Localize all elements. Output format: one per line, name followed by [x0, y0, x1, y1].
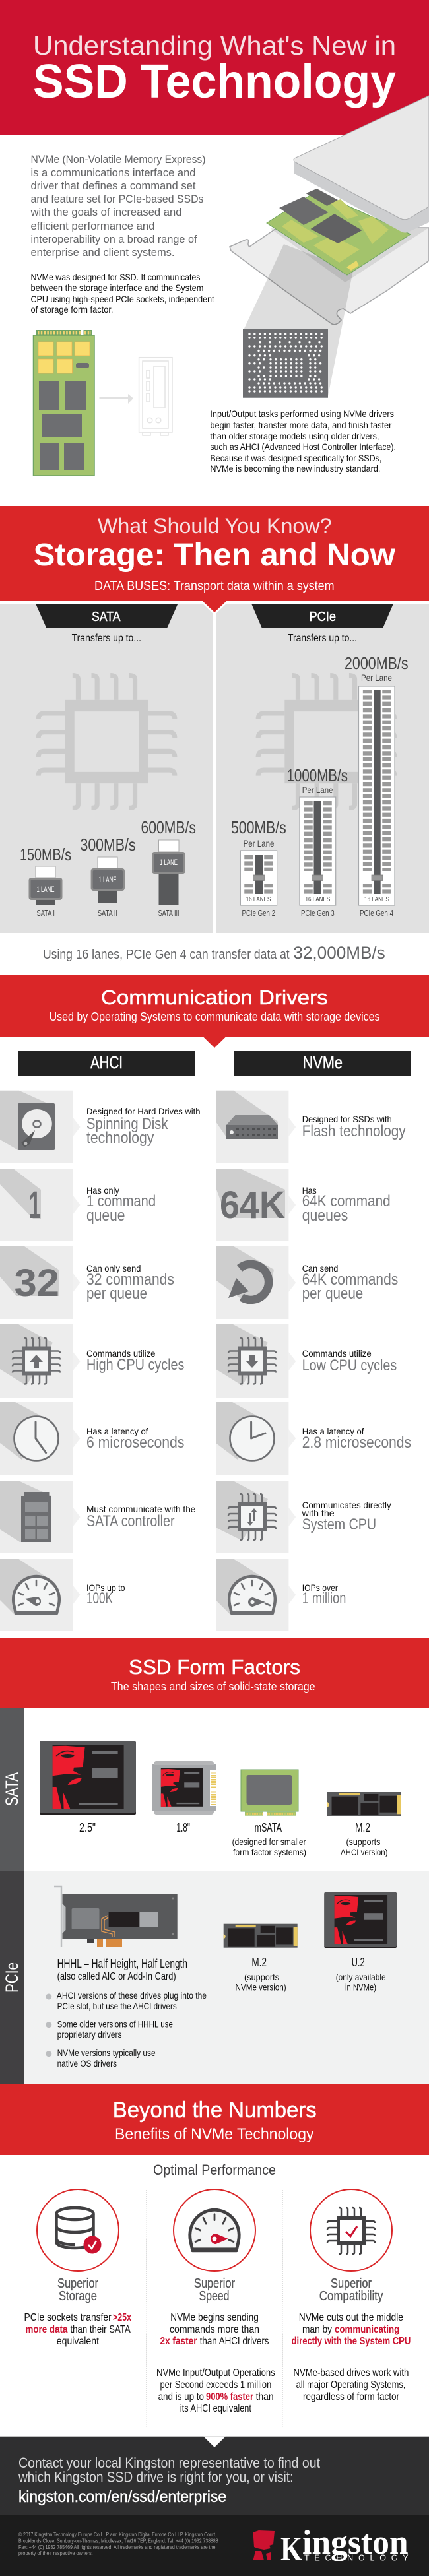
PCIe Gen 2 card: Per Lane: [244, 838, 275, 849]
fine print: Fax: +44 (0) 1932 785469 All rights reserved. All trademarks and registered trademarks are the: [18, 2544, 216, 2550]
PCIe Gen 2 card: [231, 818, 286, 918]
footer: [0, 2515, 429, 2576]
panel: SATA form factors: [0, 1708, 401, 1871]
row: AHCI commands per queue: per queue: [86, 1285, 147, 1303]
exploded SSD illustration: [230, 96, 429, 396]
row: AHCI commands per queue: 32 commands: [86, 1271, 174, 1289]
row: NVMe command queues: [216, 1169, 391, 1241]
row: AHCI latency: Has a latency of: [86, 1426, 148, 1436]
row: NVMe system CPU: [216, 1481, 391, 1553]
text: speed benefit 2: and is up to: [158, 2391, 204, 2402]
drive: HHHL card: [54, 1886, 178, 1947]
paragraph: NVMe designed for SSD: CPU using high-speed PCIe sockets, independent: [30, 294, 214, 304]
section banner: communication drivers: [0, 975, 429, 1048]
drive: U.2: U.2: [352, 1956, 365, 1969]
row: NVMe system CPU: System CPU: [302, 1516, 376, 1533]
heading: storage then and now: Storage: Then and Now: [34, 538, 396, 573]
PCIe Gen 3 card: Per Lane: [302, 785, 333, 795]
sidebar label: PCIe: PCIe: [2, 1962, 22, 1993]
text: speed benefit 1: 2x faster: [160, 2336, 197, 2347]
PCIe Gen 4 card: [345, 653, 409, 918]
PCIe Gen 4 card: Per Lane: [361, 672, 392, 683]
icon: CPU with down arrow: [228, 1338, 276, 1384]
row: AHCI spinning disk: Designed for Hard Drives with: [86, 1106, 201, 1116]
row: NVMe commands per queue: per queue: [302, 1285, 363, 1303]
text: compatibility benefit 2: regardless of form factor: [303, 2391, 400, 2402]
bullet: older versions: proprietary drivers: [57, 2029, 122, 2040]
icon: database with check: [37, 2189, 119, 2271]
drive: 1.8 inch: 1.8": [176, 1821, 190, 1834]
row: NVMe command queues: Has: [302, 1185, 317, 1196]
row: AHCI IOPs: IOPs up to: [86, 1582, 125, 1593]
PCIe Gen 3 card: [286, 765, 348, 918]
icon: CPU with up arrow: [13, 1338, 60, 1384]
label: SATA transfers: Transfers up to...: [72, 633, 141, 644]
section banner: beyond the numbers: [0, 2084, 429, 2155]
fine print: Brooklands Close, Sunbury-on-Thames, Middlesex, TW16 7EP, England. Tel: +44 (0) 1932 738888: [18, 2538, 218, 2544]
column: superior compatibility: [292, 2189, 411, 2402]
sidebar label: SATA: SATA: [2, 1772, 22, 1806]
icon: number 32: 32: [15, 1262, 59, 1304]
fine print: [18, 2531, 218, 2556]
icon: refresh arrow: [228, 1264, 269, 1300]
row: AHCI spinning disk: Spinning Disk: [86, 1115, 168, 1133]
text: compatibility benefit 2: NVMe-based drives work with: [293, 2367, 409, 2379]
icon: M.2 circuit board: [33, 330, 94, 476]
SATA II stick: 1 LANE: [99, 875, 116, 884]
text: storage benefit: than their SATA: [70, 2324, 131, 2335]
text: compatibility benefit 1: NVMe cuts out the middle: [299, 2312, 403, 2323]
title line 1: Understanding What's New in: [33, 30, 396, 61]
PCIe Gen 2 card: 500MB/s: [231, 818, 286, 837]
row: AHCI command queue: queue: [86, 1207, 125, 1225]
drive: 2.5 inch: [40, 1741, 136, 1834]
banner pointer: [200, 601, 229, 615]
row: AHCI command queue: [0, 1169, 156, 1241]
column: superior storage: [24, 2189, 131, 2347]
arrow: board to computer: [99, 394, 133, 404]
drive: M.2 NVMe: (supports: [244, 1972, 279, 1982]
drive: M.2 SATA: [327, 1792, 401, 1857]
row: NVMe IOPs: 1 million: [302, 1590, 346, 1607]
heading: what should you know: What Should You Know?: [98, 514, 331, 538]
SATA I stick: 150MB/s: [20, 845, 71, 864]
icon: gauge high: [229, 1576, 275, 1615]
text: speed benefit 2: per Second exceeds 1 million: [160, 2379, 271, 2391]
row: AHCI high CPU cycles: [0, 1324, 184, 1398]
PCIe Gen 3 card: 1000MB/s: [286, 765, 348, 785]
row: NVMe flash: Flash technology: [302, 1122, 406, 1140]
row: NVMe system CPU: with the: [302, 1508, 335, 1518]
paragraph: NVMe designed for SSD: between the storage interface and the System: [30, 282, 203, 293]
panel: PCIe form factors: [0, 1871, 429, 2084]
icon: chip underside with solder balls: [243, 329, 328, 398]
drive: U.2: in NVMe): [345, 1982, 376, 1993]
text: compatibility benefit 1: man by: [302, 2324, 332, 2335]
column heading: AHCI: [18, 1051, 195, 1076]
drive: mSATA: mSATA: [255, 1821, 282, 1834]
paragraph: NVMe designed for SSD: NVMe was designed for SSD. It communicates: [30, 272, 201, 282]
column: superior speed: Superior: [194, 2276, 235, 2291]
drive: M.2 SATA: M.2: [355, 1821, 370, 1834]
row: AHCI high CPU cycles: Commands utilize: [86, 1348, 156, 1359]
text: compatibility benefit 1: [292, 2312, 411, 2347]
text: speed benefit 1: commands more than: [170, 2324, 259, 2335]
drive: 2.5 inch: 2.5": [79, 1821, 96, 1834]
paragraph: NVMe designed for SSD: [30, 272, 214, 315]
text: speed benefit 2: NVMe Input/Output Operations: [156, 2367, 275, 2379]
bar chart: SATA speeds: [20, 818, 196, 918]
SATA I stick: [20, 845, 71, 918]
intro paragraph: with the goals of increased and: [30, 206, 182, 218]
bullet: older versions: Some older versions of HHHL use: [57, 2019, 173, 2030]
row: AHCI IOPs: [0, 1559, 125, 1631]
text: speed benefit 1: than AHCI drivers: [200, 2336, 269, 2347]
intro paragraph: NVMe (Non-Volatile Memory Express): [30, 153, 206, 166]
PCIe Gen 3 card: PCIe Gen 3: [301, 908, 335, 918]
section banner: communication drivers: Communication Drivers: [101, 986, 328, 1009]
text: speed benefit 2: 900% faster: [206, 2391, 253, 2402]
PCIe Gen 2 card: PCIe Gen 2: [242, 908, 275, 918]
row: NVMe command queues: 64K command: [302, 1192, 391, 1210]
icon: flash drive box: [226, 1115, 278, 1139]
text: compatibility benefit 1: communicating: [335, 2324, 399, 2335]
column heading: AHCI: AHCI: [90, 1052, 123, 1072]
contact band: kingston.com/en/ssd/enterprise: [18, 2488, 226, 2506]
SATA III stick: [141, 818, 196, 918]
SATA III stick: 600MB/s: [141, 818, 196, 837]
text: storage benefit: equivalent: [57, 2336, 99, 2347]
drive: M.2 NVMe: M.2: [251, 1956, 267, 1969]
SATA III stick: SATA III: [158, 908, 180, 918]
column: superior storage: Superior: [57, 2276, 98, 2291]
row: AHCI high CPU cycles: High CPU cycles: [86, 1356, 184, 1374]
row: NVMe flash: Designed for SSDs with: [302, 1114, 392, 1124]
row: NVMe low CPU cycles: Commands utilize: [302, 1348, 372, 1359]
icon: CPU with check: [310, 2189, 392, 2271]
text: storage benefit: more data: [25, 2324, 67, 2335]
paragraph: NVMe designed for SSD: of storage form factor.: [30, 304, 114, 315]
row: AHCI SATA controller: [0, 1481, 196, 1553]
fine print: © 2017 Kingston Technology Europe Co LLP and Kingston Digital Europe Co LLP, Kingston Court,: [18, 2531, 216, 2538]
SATA I stick: 1 LANE: [37, 885, 54, 894]
row: NVMe commands per queue: 64K commands: [302, 1271, 398, 1289]
section banner: SSD form factors: [0, 1638, 429, 1708]
intro paragraph: and feature set for PCIe-based SSDs: [30, 193, 203, 205]
intro paragraph: enterprise and client systems.: [30, 246, 174, 259]
text: speed benefit 1: [160, 2312, 269, 2347]
icon: SATA controller: [21, 1492, 51, 1542]
icon: hard disk: [18, 1103, 55, 1150]
text: HHHL description: (also called AIC or Add-In Card): [57, 1971, 176, 1982]
column: superior compatibility: Superior: [331, 2276, 372, 2291]
bullet: AHCI versions: AHCI versions of these drives plug into the: [57, 1990, 207, 2001]
paragraph: input/output tasks: than older storage models using older drivers,: [210, 431, 379, 441]
SATA I stick: SATA I: [37, 908, 55, 918]
title banner: [0, 0, 429, 135]
column: superior storage: Storage: [59, 2289, 97, 2303]
row: AHCI command queue: 1 command: [86, 1192, 156, 1210]
icon: 64K: 64K: [220, 1184, 285, 1227]
paragraph: input/output tasks: NVMe is becoming the new industry standard.: [210, 463, 380, 474]
row: NVMe IOPs: [216, 1559, 346, 1631]
text: compatibility benefit 2: [293, 2367, 409, 2402]
intro paragraph: driver that defines a command set: [30, 179, 196, 192]
logo: Kingston wordmark: K: [280, 2530, 302, 2568]
icon: gauge low: [13, 1576, 59, 1615]
text: storage benefit: >25x: [113, 2312, 131, 2323]
paragraph: input/output tasks: Because it was designed specifically for SSDs,: [210, 453, 381, 463]
PCIe Gen 4 card: 2000MB/s: [345, 653, 409, 673]
paragraph: input/output tasks: begin faster, transfer more data, and finish faster: [210, 420, 392, 430]
contact band: [0, 2437, 429, 2515]
tab: PCIe: PCIe: [309, 610, 336, 624]
PCIe Gen 4 card: 16 LANES: [364, 895, 389, 903]
intro paragraph: efficient performance and: [30, 220, 154, 232]
SATA II stick: SATA II: [98, 908, 117, 918]
icon: CPU with two-way arrows: [228, 1494, 276, 1540]
paragraph: input/output tasks: Input/Output tasks performed using NVMe drivers: [210, 408, 394, 419]
row: AHCI latency: [0, 1402, 184, 1475]
drive: M.2 SATA: AHCI version): [341, 1847, 388, 1857]
icon: PCIe chip watermark: [258, 676, 395, 808]
row: NVMe IOPs: IOPs over: [302, 1582, 338, 1593]
row: AHCI command queue: Has only: [86, 1185, 119, 1196]
bullet: AHCI versions: [46, 1990, 207, 2011]
tab: PCIe: [251, 604, 393, 628]
row: NVMe low CPU cycles: [216, 1324, 397, 1398]
row: NVMe system CPU: Communicates directly: [302, 1500, 391, 1510]
text: speed benefit 2: [156, 2367, 275, 2414]
section banner: SSD form factors: SSD Form Factors: [129, 1656, 300, 1679]
row: AHCI commands per queue: Can only send: [86, 1263, 141, 1273]
drive: M.2 NVMe: NVMe version): [235, 1982, 286, 1993]
bar chart: PCIe speeds: [231, 653, 409, 918]
drive: mSATA: form factor systems): [233, 1847, 306, 1857]
row: NVMe command queues: queues: [302, 1207, 348, 1225]
logo: Kingston head: [253, 2530, 275, 2560]
title line 2: SSD Technology: [33, 55, 396, 108]
drive: mSATA: [232, 1770, 306, 1857]
icon: clock 6 microseconds: [15, 1416, 58, 1461]
callout: 32,000MB/s: Using 16 lanes, PCIe Gen 4 can transfer data at: [43, 948, 290, 962]
text: speed benefit 2: its AHCI equivalent: [180, 2403, 251, 2414]
row: AHCI latency: 6 microseconds: [86, 1434, 184, 1452]
SATA II stick: 300MB/s: [81, 835, 136, 854]
row: AHCI spinning disk: technology: [86, 1129, 154, 1147]
PCIe Gen 4 card: PCIe Gen 4: [360, 908, 393, 918]
icon: speed gauge: [174, 2189, 255, 2271]
column: superior speed: [156, 2189, 275, 2414]
column: superior speed: Speed: [199, 2289, 230, 2303]
callout: 32,000MB/s: [43, 943, 385, 963]
icon: SATA chip watermark: [38, 676, 175, 808]
tab: SATA: SATA: [92, 610, 121, 624]
drive: M.2 SATA: (supports: [346, 1836, 380, 1847]
text: compatibility benefit 2: all major Operating Systems,: [296, 2379, 405, 2391]
drive: mSATA: (designed for smaller: [232, 1836, 306, 1847]
row: NVMe commands per queue: [216, 1246, 398, 1319]
row: AHCI SATA controller: SATA controller: [86, 1512, 175, 1530]
drive: 1.8 inch: [152, 1761, 216, 1834]
section banner: communication drivers: Used by Operating Systems to communicate data with storage devices: [50, 1010, 380, 1023]
text: speed benefit 2: than: [256, 2391, 274, 2402]
row: AHCI commands per queue: [0, 1246, 174, 1319]
contact band: Contact your local Kingston representative to find out: [18, 2455, 320, 2471]
SATA II stick: [81, 835, 136, 918]
text: storage benefit: PCIe sockets transfer: [24, 2312, 112, 2323]
bullet: older versions: [46, 2019, 173, 2040]
icon: number 1: 1: [29, 1184, 41, 1227]
section banner: storage then and now: [0, 506, 429, 601]
row: AHCI SATA controller: Must communicate with the: [86, 1504, 196, 1514]
drive: U.2: [324, 1892, 397, 1993]
row: AHCI spinning disk: [0, 1091, 201, 1163]
bullet: AHCI versions: PCIe slot, but use the AHCI drivers: [57, 2001, 177, 2011]
intro paragraph: [30, 153, 205, 259]
text: speed benefit 1: NVMe begins sending: [170, 2312, 259, 2323]
panel: comparison background: [0, 604, 429, 933]
label: PCIe transfers: Transfers up to...: [288, 633, 357, 644]
paragraph: input/output tasks: such as AHCI (Advanced Host Controller Interface).: [210, 441, 396, 452]
subheading: data buses: DATA BUSES: Transport data within a system: [94, 579, 335, 593]
SATA III stick: 1 LANE: [160, 858, 178, 867]
logo: Kingston wordmark: TECHNOLOGY: [304, 2554, 409, 2563]
row: NVMe latency: Has a latency of: [302, 1426, 364, 1436]
paragraph: input/output tasks: [210, 408, 396, 474]
bullet: NVMe versions: NVMe versions typically use: [57, 2047, 156, 2058]
section banner: SSD form factors: The shapes and sizes of solid-state storage: [111, 1680, 315, 1693]
section banner: beyond the numbers: Beyond the Numbers: [113, 2098, 317, 2123]
tab: SATA: [36, 604, 178, 628]
contact band: which Kingston SSD drive is right for you, or visit:: [18, 2469, 293, 2486]
PCIe Gen 2 card: 16 LANES: [246, 895, 271, 903]
icon: clock 2.8 microseconds: [230, 1416, 275, 1461]
logo: Kingston wordmark: ingston: [302, 2524, 409, 2561]
text: HHHL description: [57, 1957, 187, 1982]
text: HHHL description: HHHL – Half Height, Half Length: [57, 1957, 187, 1970]
bullet: NVMe versions: [46, 2047, 156, 2069]
row: NVMe latency: 2.8 microseconds: [302, 1434, 411, 1452]
text: storage benefit: [24, 2312, 131, 2347]
bullet: NVMe versions: native OS drivers: [57, 2058, 117, 2069]
intro paragraph: interoperability on a broad range of: [30, 233, 197, 245]
drive: M.2 NVMe: [224, 1924, 298, 1993]
row: NVMe flash: [216, 1091, 406, 1163]
icon: desktop computer outline: [139, 358, 172, 435]
column heading: NVMe: [234, 1051, 411, 1076]
heading: optimal performance: Optimal Performance: [153, 2162, 276, 2178]
column: superior compatibility: Compatibility: [319, 2289, 383, 2303]
intro paragraph: is a communications interface and: [30, 166, 195, 179]
row: AHCI IOPs: 100K: [86, 1590, 113, 1607]
drive: U.2: (only available: [336, 1972, 386, 1982]
row: NVMe low CPU cycles: Low CPU cycles: [302, 1357, 397, 1374]
column heading: NVMe: NVMe: [302, 1052, 343, 1072]
fine print: property of their respective owners.: [18, 2550, 93, 2556]
PCIe Gen 3 card: 16 LANES: [305, 895, 330, 903]
section banner: beyond the numbers: Benefits of NVMe Technology: [115, 2125, 314, 2143]
row: NVMe commands per queue: Can send: [302, 1263, 338, 1273]
callout: 32,000MB/s: 32,000MB/s: [293, 943, 385, 963]
row: NVMe latency: [216, 1402, 411, 1475]
